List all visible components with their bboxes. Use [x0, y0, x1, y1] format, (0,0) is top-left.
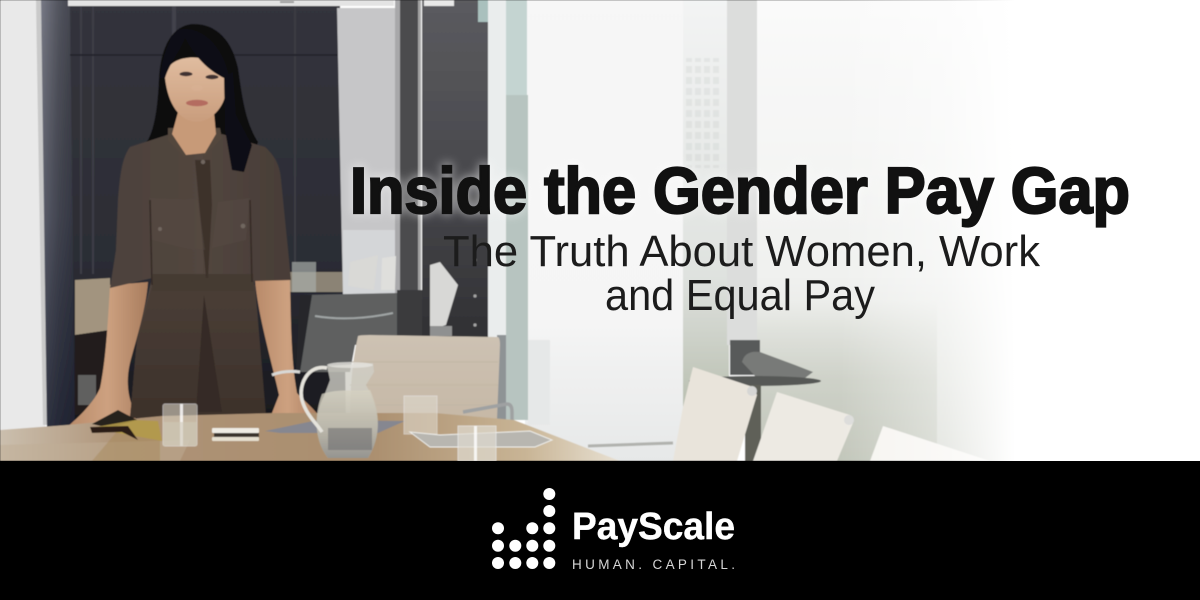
dress: [110, 134, 291, 418]
logo tagline: HUMAN. CAPITAL.: [572, 557, 735, 572]
eyes and lips: [180, 72, 192, 76]
water pitcher: [301, 362, 378, 458]
right background window and walls: [0, 0, 1200, 461]
neck: [172, 112, 216, 155]
grey wall and top beam: [68, 0, 397, 300]
hair back: [140, 24, 258, 172]
conference table: [0, 413, 620, 461]
glass left: [163, 404, 197, 446]
hair fringe: [160, 29, 229, 78]
hand shadow: [92, 410, 137, 428]
PayScale logo: [492, 488, 735, 572]
notebook on table: [410, 431, 552, 447]
logo wordmark: PayScale: [572, 506, 735, 548]
bracelet: [272, 371, 300, 375]
title: Inside the Gender Pay Gap: [350, 154, 1130, 227]
glass middle: [404, 396, 437, 434]
reflected table: [75, 278, 110, 335]
dark room interior: [70, 4, 346, 430]
office photo scene: [0, 0, 1200, 461]
footer band: [0, 461, 1200, 600]
icon: dot bars: [492, 488, 555, 569]
left wall: [0, 0, 46, 461]
subtitle: The Truth About Women, Work: [443, 227, 1041, 276]
tan chair: [350, 335, 512, 420]
subtitle: [443, 227, 1041, 320]
right white fade: [840, 0, 1015, 461]
brochure on table: [265, 420, 405, 433]
glass right: [458, 426, 496, 461]
right arm: [255, 280, 320, 418]
glass partition: [395, 0, 550, 425]
left arm: [67, 282, 148, 427]
phones on table: [212, 428, 259, 441]
title halo: Inside the Gender Pay Gap: [350, 153, 1130, 227]
collar: [168, 128, 222, 157]
right white chairs, phone and side table: [588, 340, 990, 461]
woman: [67, 24, 320, 427]
left window frame: [41, 0, 76, 430]
sunglasses: [90, 420, 162, 441]
dress placket and pockets: [195, 160, 212, 278]
face: [165, 58, 226, 122]
subtitle: and Equal Pay: [605, 271, 875, 320]
reflected chairs in glass: [296, 255, 458, 372]
